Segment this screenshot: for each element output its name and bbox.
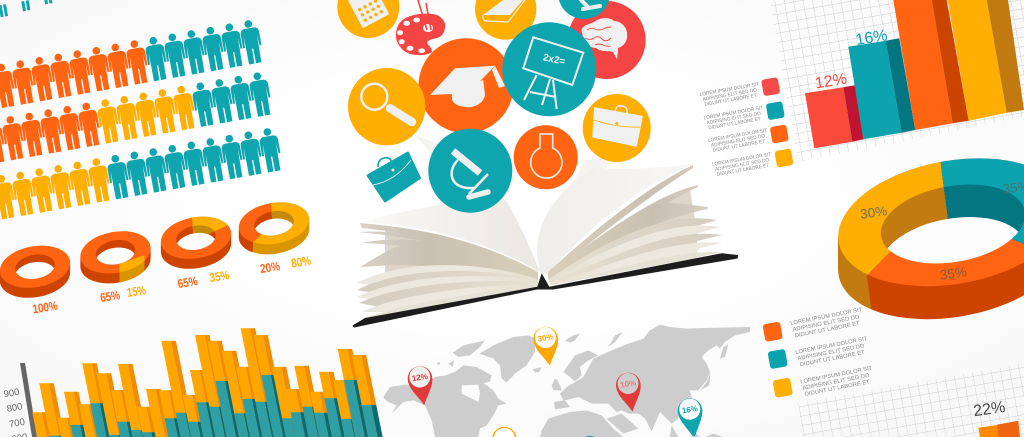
legend item yellow: ADIPISING ELIT SED DO (802, 373, 871, 392)
icon: book (475, 0, 536, 40)
legend item red: LOREM IPSUM DOLOR SIT (699, 82, 759, 98)
icon: blackboard with sum (502, 22, 596, 116)
map pin 30% (532, 325, 562, 368)
legend item teal (703, 101, 785, 132)
donut labels (859, 178, 1024, 283)
icon: brain (568, 1, 646, 79)
legend item yellow: LOREM IPSUM DOLOR SIT (712, 152, 772, 168)
icon: graduation cap (418, 38, 514, 133)
grid (798, 363, 1024, 437)
light rays rising from book (415, 135, 612, 245)
legend item red (699, 77, 780, 108)
icon bubbles (337, 0, 651, 213)
donut 20/80 (238, 202, 310, 254)
legend item orange (708, 124, 789, 154)
y axis labels: 700 (8, 417, 26, 430)
bar 12% (805, 85, 864, 148)
y axis labels: 800 (6, 401, 23, 415)
orange bar (978, 421, 1020, 437)
donut labels: 80% (290, 254, 312, 271)
legend item teal: DIDUNT UT LABORE ET (708, 116, 761, 131)
legend item orange: LOREM IPSUM DOLOR SIT (708, 128, 768, 144)
map pin 10% (614, 371, 645, 414)
bottom right bar chart (798, 363, 1024, 437)
donut segments (838, 158, 1024, 320)
donut 100% (0, 240, 74, 303)
legend item yellow: DIDUNT UT LABORE ET (804, 379, 871, 398)
bar chart bottom left (3, 328, 383, 437)
legend item orange: DIDUNT UT LABORE ET (712, 139, 766, 154)
donut labels: 65% (99, 288, 121, 305)
left white page (364, 200, 540, 272)
donut labels: 35% (208, 268, 230, 285)
icon: flask (514, 125, 578, 189)
legend item yellow (773, 366, 876, 398)
legend item red: ADIPISING ELIT SED DO (702, 87, 758, 103)
icon: microscope top (558, 0, 610, 19)
left page stack (357, 223, 538, 318)
continents west (383, 335, 562, 437)
bars (15, 328, 383, 437)
legend item yellow: LOREM IPSUM DOLOR SIT (800, 366, 873, 385)
legend item orange: LOREM IPSUM DOLOR SIT (790, 307, 863, 327)
label 16%: 16% (854, 27, 889, 49)
continents east (540, 325, 750, 437)
left page body (385, 231, 538, 312)
legend item orange: ADIPISING ELIT SED DO (710, 133, 766, 149)
people row 1 (0, 19, 264, 109)
icon: blackboard with sum: 2x2= (542, 52, 566, 68)
bar 16% (848, 38, 915, 139)
donut labels: 35% (939, 264, 968, 283)
icon: magnifying glass (348, 68, 425, 145)
large 3D donut chart (838, 158, 1024, 320)
map pin 12% (406, 364, 436, 407)
legend item orange (763, 307, 866, 342)
bar yellow (948, 0, 1024, 121)
partial top row of teal figures (0, 0, 74, 17)
people row 3 (0, 127, 283, 220)
donut 65/15 (80, 231, 151, 284)
world map (383, 325, 750, 437)
book cover (352, 253, 738, 328)
legend item yellow: ADIPISING ELIT SED DO (714, 157, 770, 173)
legend item red: DIDUNT UT LABORE ET (704, 93, 757, 108)
icon: paint palette (396, 0, 445, 55)
right page stack (548, 165, 722, 285)
donut labels: 100% (32, 299, 59, 316)
map pin 16% (676, 397, 706, 437)
people pictogram chart (0, 0, 283, 220)
donut 65/35 (160, 216, 232, 269)
donut labels: 30% (859, 203, 888, 222)
grid (770, 0, 1024, 162)
icon: teal briefcase (368, 152, 420, 202)
label 22%: 22% (972, 399, 1006, 420)
donut labels: 20% (259, 259, 281, 276)
y axis labels: 900 (3, 387, 20, 400)
donut labels (32, 254, 312, 316)
map pin 30%: 30% (537, 332, 554, 344)
map pin bottom teal (585, 436, 595, 437)
top right bar chart (770, 0, 1024, 162)
legend item orange: DIDUNT UT LABORE ET (794, 321, 861, 339)
bar orange (893, 0, 969, 130)
small donut charts (0, 197, 313, 316)
right white page (537, 164, 692, 276)
legend item teal: LOREM IPSUM DOLOR SIT (795, 336, 868, 356)
label 12%: 12% (814, 71, 848, 92)
bottom right legend (763, 307, 876, 398)
top legend (699, 77, 794, 178)
icon: microscope (428, 129, 512, 213)
legend item yellow (712, 148, 794, 178)
legend item teal: ADIPISING ELIT SED DO (797, 343, 866, 362)
legend item teal: DIDUNT UT LABORE ET (799, 350, 866, 368)
donut labels: 15% (126, 283, 147, 300)
legend item teal (768, 336, 871, 369)
map pin 10%: 10% (620, 378, 637, 390)
legend item teal: ADIPISING ELIT SED DO (706, 111, 762, 126)
people row 2 (0, 71, 273, 164)
map pin bottom yellow (492, 427, 516, 437)
right page body (548, 190, 697, 285)
open book (352, 164, 738, 328)
map pin 12%: 12% (411, 372, 428, 383)
legend item yellow: DIDUNT UT LABORE ET (716, 163, 770, 178)
y axis labels (3, 387, 28, 437)
donut labels: 65% (177, 274, 199, 291)
legend item orange: ADIPISING ELIT SED DO (792, 314, 861, 333)
icon: yellow briefcase (583, 94, 651, 162)
y axis (20, 363, 37, 437)
map pin 16%: 16% (681, 404, 698, 415)
legend item teal: LOREM IPSUM DOLOR SIT (703, 105, 763, 121)
icon: calculator (337, 0, 399, 38)
